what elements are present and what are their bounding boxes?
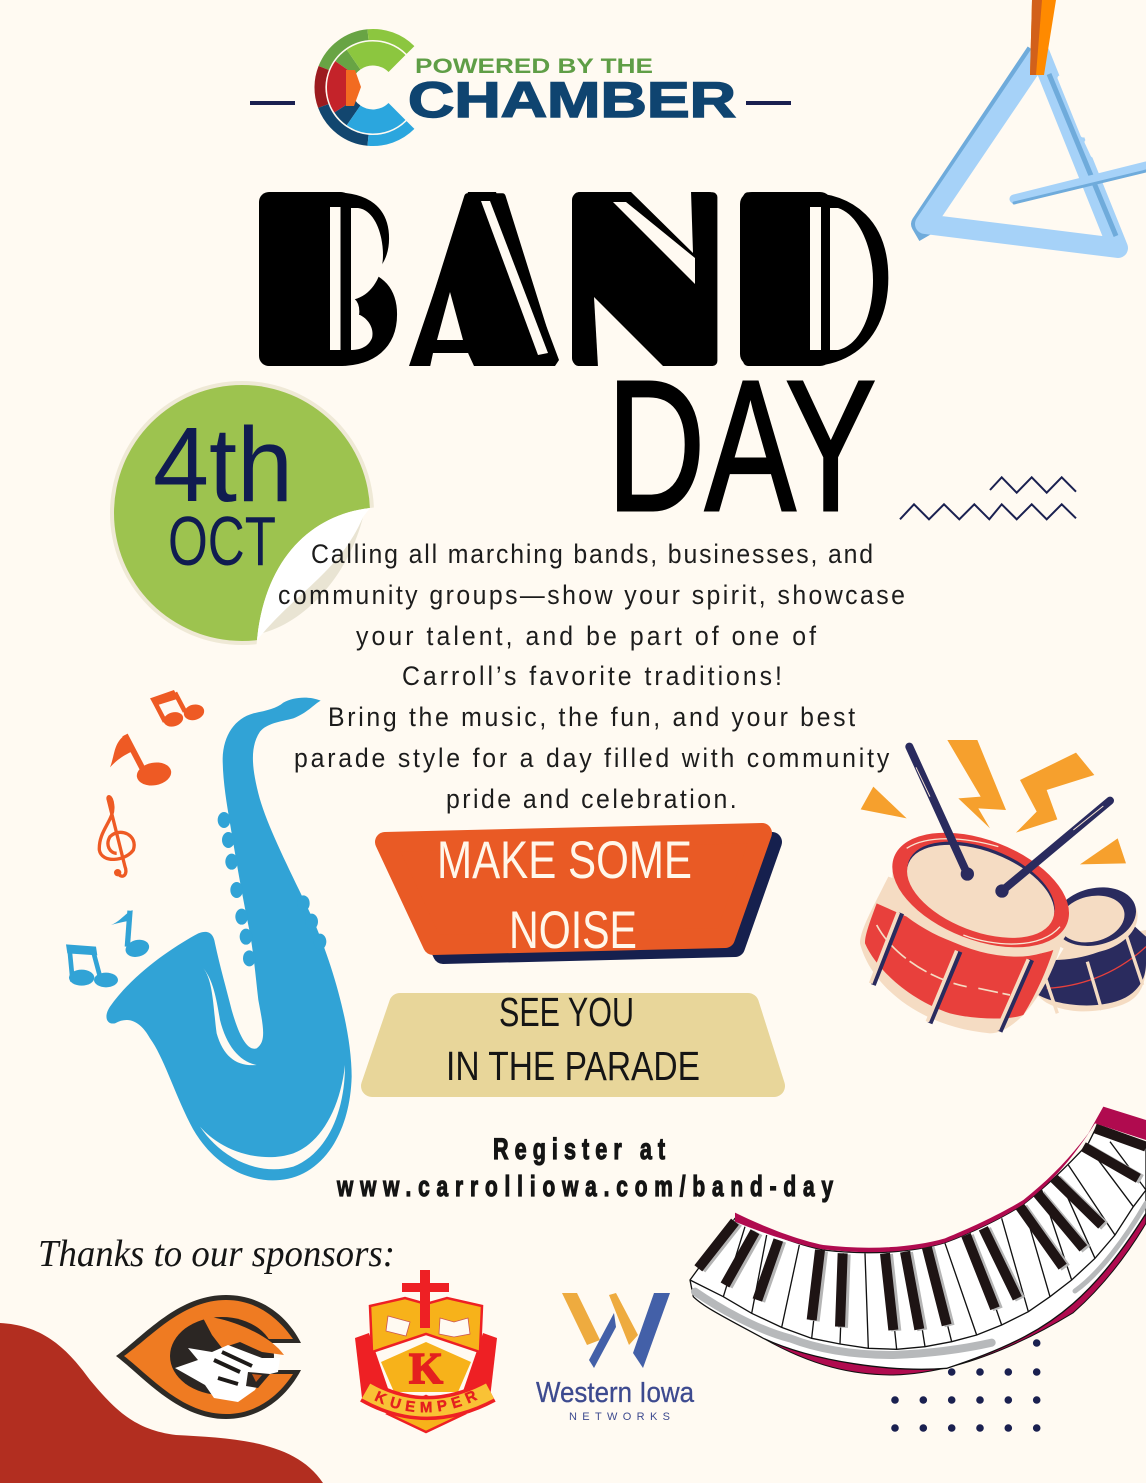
- dot grid: [891, 1339, 1040, 1432]
- icon: orange music notes: [99, 690, 206, 876]
- drumsticks: [909, 747, 967, 874]
- icon: drums: [860, 740, 1146, 1033]
- icon: blue music notes: [66, 910, 151, 987]
- registration text: www.carrolliowa.com/band-day: [336, 1171, 833, 1203]
- title: BAND: A: [411, 147, 559, 412]
- title: BAND: [256, 147, 893, 412]
- icon: curved piano keyboard: [690, 1107, 1146, 1375]
- intro paragraph: parade style for a day filled with community: [294, 744, 889, 773]
- logo: Western Iowa Networks: NETWORKS: [569, 1411, 670, 1423]
- logo: tiger C: [116, 1295, 301, 1419]
- icon: triangle instrument: [921, 0, 1146, 248]
- banner: see you in the parade: IN THE PARADE: [446, 1043, 700, 1089]
- banner: see you in the parade: SEE YOU: [499, 989, 634, 1035]
- logo: Kuemper: K: [409, 1344, 443, 1393]
- chamber logo: [250, 34, 791, 141]
- logo: Western Iowa Networks: [536, 1293, 695, 1423]
- intro paragraph: community groups—show your spirit, showcase: [278, 581, 905, 610]
- black keys: [698, 1128, 1146, 1330]
- title: BAND: D: [733, 147, 893, 412]
- date sticker: OCT: [168, 502, 276, 580]
- intro paragraph: Calling all marching bands, businesses, and: [311, 540, 873, 569]
- registration text: [336, 1131, 833, 1203]
- date sticker: 4th: [153, 406, 293, 524]
- zigzag decoration: [900, 477, 1076, 519]
- intro paragraph: Bring the music, the fun, and your best: [328, 703, 856, 732]
- red corner blob: [0, 1323, 323, 1483]
- title: BAND: B: [256, 147, 402, 412]
- logo: Kuemper: [355, 1270, 497, 1434]
- date sticker: [110, 381, 378, 650]
- lightning bolts: [861, 740, 1126, 864]
- sponsors heading: Thanks to our sponsors:: [38, 1233, 395, 1275]
- black key shadows: [701, 1148, 1141, 1331]
- title: DAY: DAY: [607, 343, 876, 550]
- banner: make some noise: MAKE SOME: [437, 831, 692, 890]
- maroon fallboard: [735, 1107, 1146, 1252]
- white key separators: [723, 1142, 1146, 1349]
- registration text: Register at: [493, 1131, 665, 1166]
- logo: Kuemper: KUEMPER: [374, 1390, 478, 1412]
- intro paragraph: [278, 540, 905, 814]
- logo: Western Iowa Networks: Western Iowa: [536, 1377, 695, 1409]
- banner: make some noise: [385, 831, 772, 960]
- title: BAND: N: [563, 147, 728, 412]
- banner: see you in the parade: [372, 989, 774, 1089]
- intro paragraph: pride and celebration.: [446, 785, 737, 814]
- banner: make some noise: NOISE: [509, 901, 637, 960]
- icon: saxophone: [106, 698, 352, 1180]
- intro paragraph: Carroll’s favorite traditions!: [402, 662, 782, 691]
- chamber logo: POWERED BY THE: [415, 55, 653, 78]
- chamber logo: CHAMBER: [408, 72, 736, 128]
- intro paragraph: your talent, and be part of one of: [356, 622, 817, 651]
